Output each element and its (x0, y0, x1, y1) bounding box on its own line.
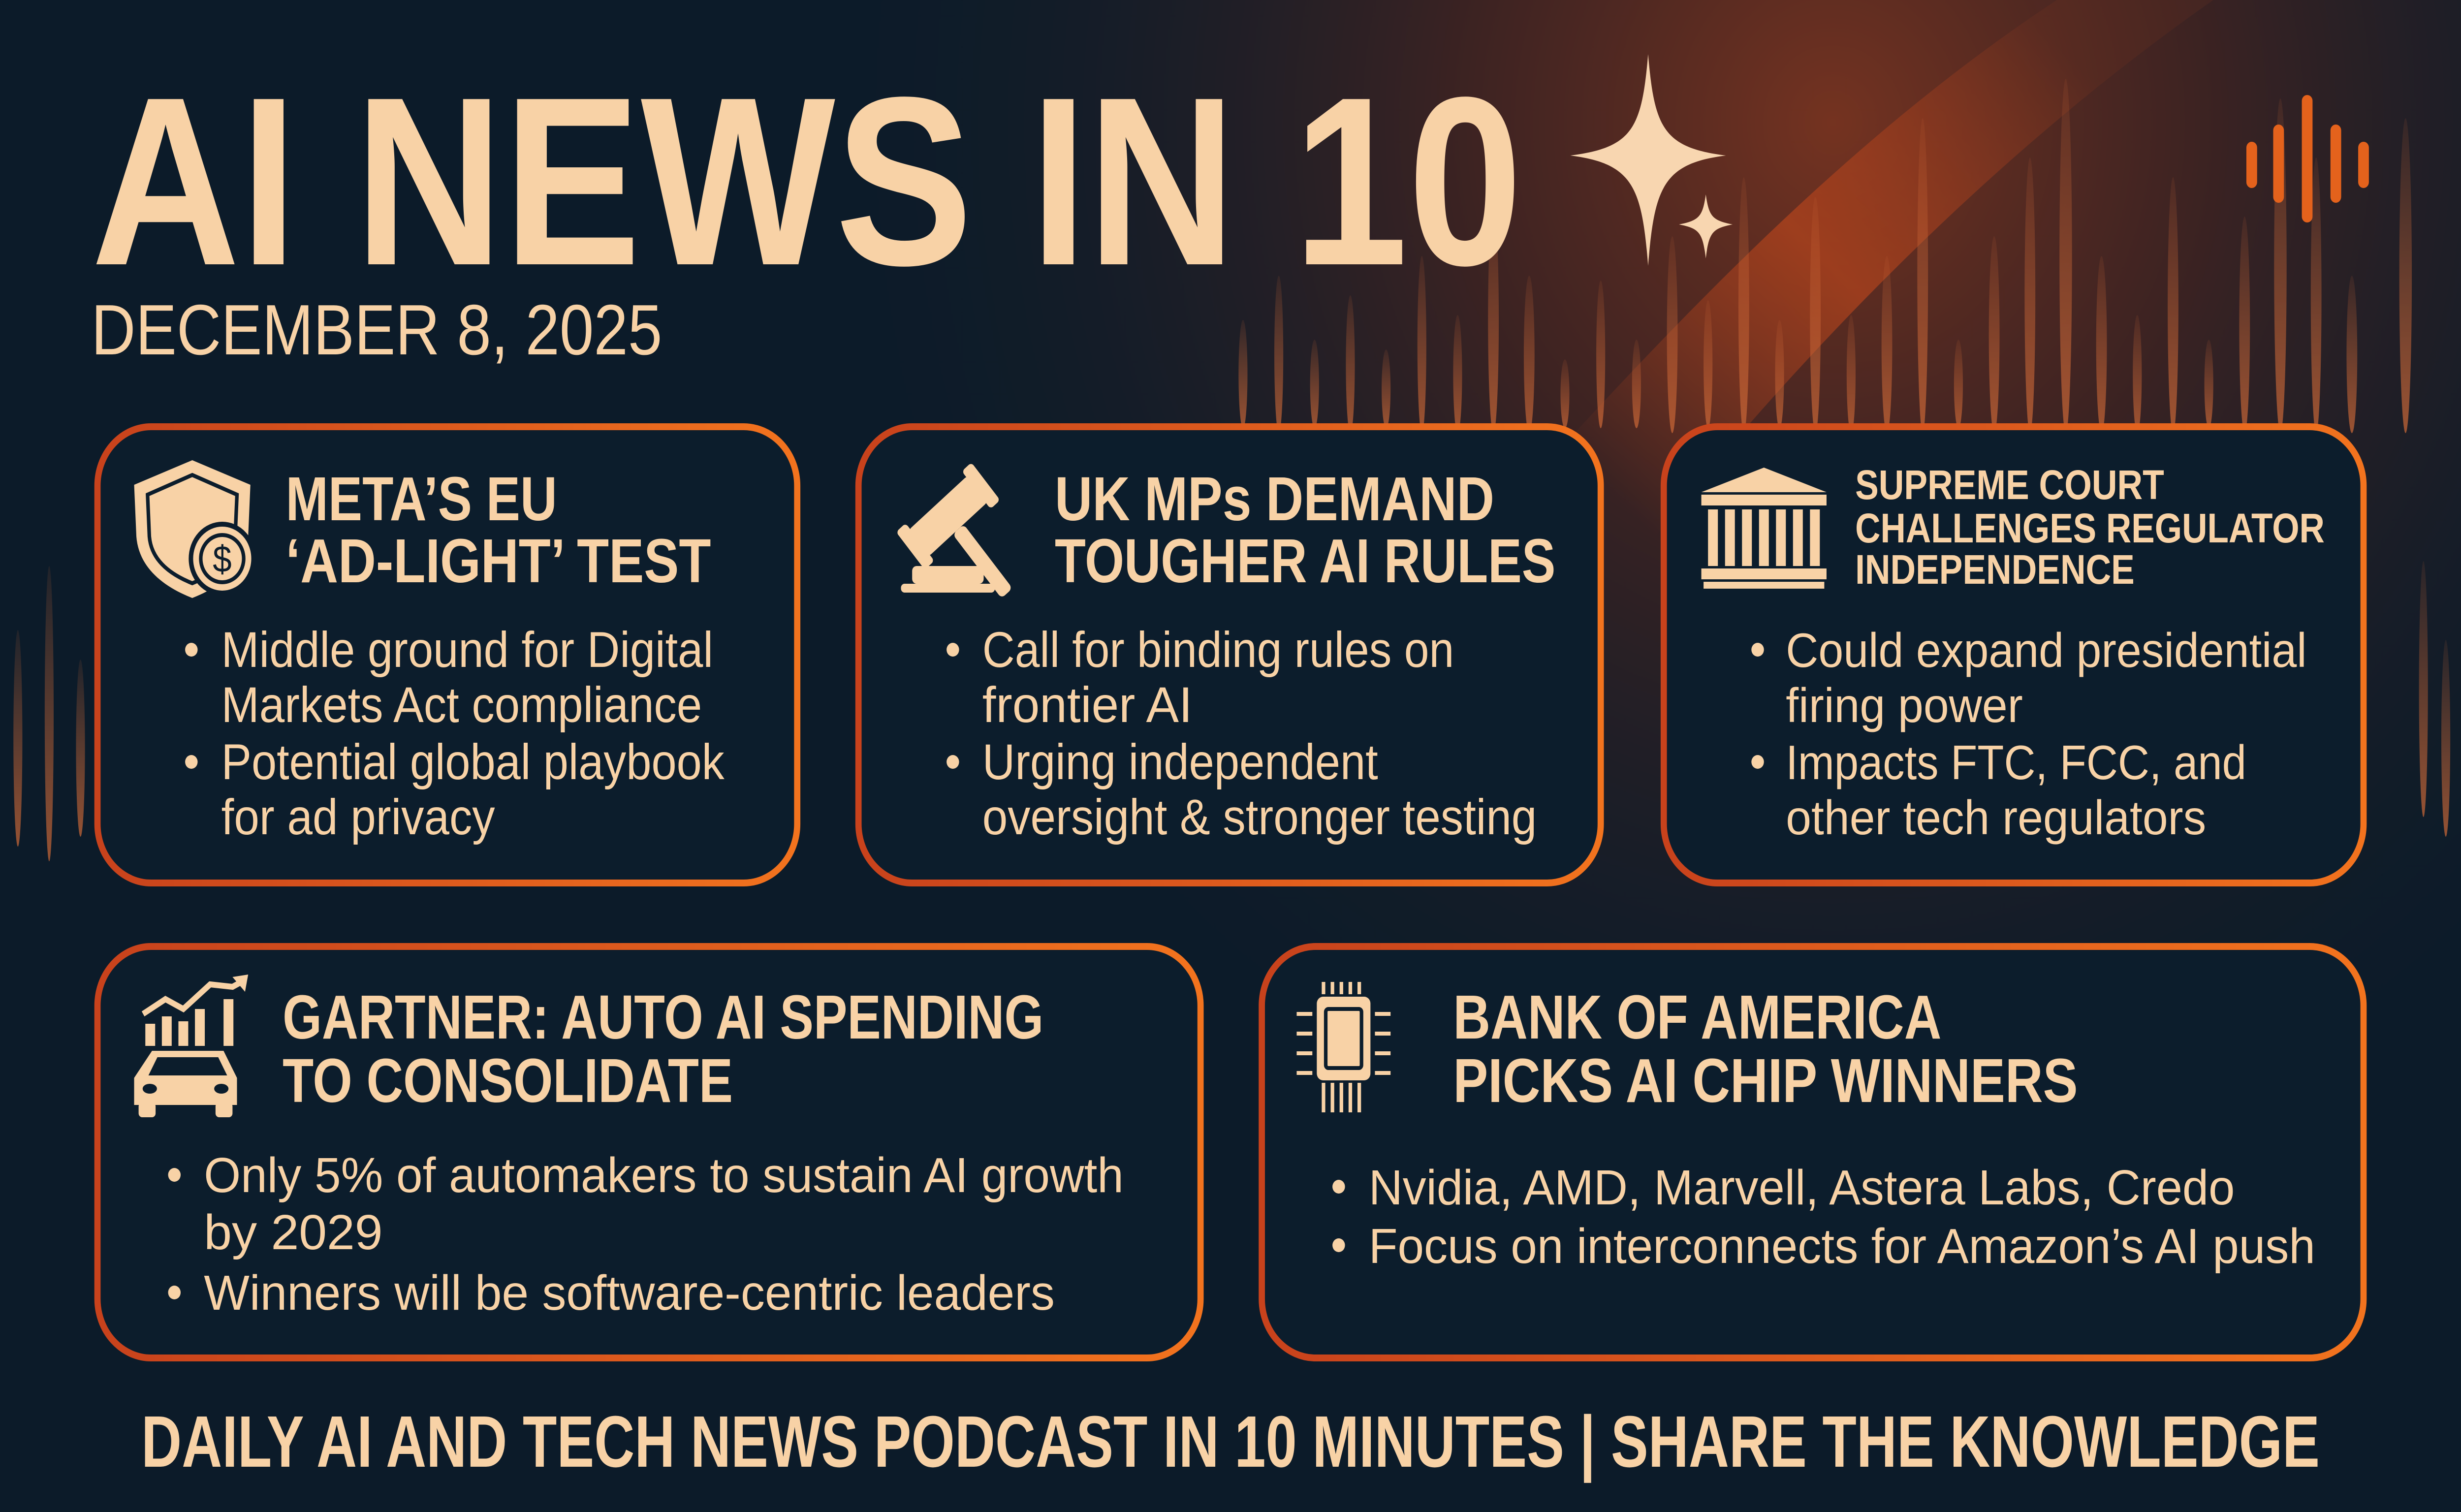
bullets (1332, 1161, 2315, 1274)
icon: shield with dollar: $ (213, 538, 232, 580)
bullets (185, 622, 725, 845)
heading: BANK OF AMERICA (1453, 982, 1941, 1052)
heading (1453, 982, 2078, 1115)
bullets: Middle ground for Digital (221, 622, 713, 678)
icon: sparkles (1570, 54, 1733, 266)
heading: SUPREME COURT (1855, 462, 2164, 508)
bullets: Could expand presidential (1786, 623, 2307, 677)
heading: META’S EU (285, 464, 557, 534)
panel: Meta (97, 427, 797, 883)
bullets: for ad privacy (221, 789, 495, 845)
heading: ‘AD-LIGHT’ TEST (285, 526, 711, 596)
panel: UK MPs (858, 427, 1601, 883)
panel: Supreme Court (1664, 427, 2364, 883)
bullets: Impacts FTC, FCC, and (1786, 735, 2246, 789)
heading: TO CONSOLIDATE (283, 1046, 733, 1115)
heading: CHALLENGES REGULATOR (1855, 505, 2325, 552)
bullets: Only 5% of automakers to sustain AI growth (204, 1148, 1124, 1203)
heading (285, 464, 711, 596)
bullets: Call for binding rules on (982, 622, 1454, 678)
bullets: Nvidia, AMD, Marvell, Astera Labs, Credo (1369, 1161, 2235, 1215)
heading (283, 982, 1043, 1115)
heading (1855, 462, 2325, 593)
bullets: Focus on interconnects for Amazon’s AI push (1369, 1219, 2315, 1274)
icon: car with growth chart (134, 975, 248, 1117)
heading: GARTNER: AUTO AI SPENDING (283, 982, 1043, 1052)
icon: podcast waveform (2252, 101, 2364, 217)
heading: UK MPs DEMAND (1055, 464, 1494, 534)
bullets: firing power (1786, 678, 2023, 732)
bullets: by 2029 (204, 1205, 383, 1260)
bullets: frontier AI (982, 677, 1193, 733)
icon: gavel (896, 463, 1044, 628)
bullets: other tech regulators (1786, 790, 2206, 845)
footer: DAILY AI AND TECH NEWS PODCAST IN 10 MINUTES | SHARE THE KNOWLEDGE (141, 1401, 2320, 1483)
heading (1055, 464, 1555, 596)
date: DECEMBER 8, 2025 (91, 290, 662, 370)
icon: chip (1296, 982, 1390, 1112)
bullets (168, 1148, 1124, 1321)
bullets (1751, 623, 2307, 845)
panel: Gartner (97, 946, 1200, 1358)
bullets: oversight & stronger testing (982, 789, 1537, 845)
bullets: Winners will be software-centric leaders (204, 1266, 1055, 1321)
bullets: Urging independent (982, 734, 1378, 790)
icon: shield with dollar (134, 460, 253, 598)
icon: courthouse (1702, 468, 1827, 589)
title: AI NEWS IN 10 (91, 47, 1522, 315)
bullets (947, 622, 1537, 845)
bullets: Markets Act compliance (221, 677, 702, 733)
panel: Bank of America (1262, 946, 2364, 1358)
heading: PICKS AI CHIP WINNERS (1453, 1046, 2078, 1115)
bullets: Potential global playbook (221, 734, 725, 790)
heading: INDEPENDENCE (1855, 547, 2135, 593)
heading: TOUGHER AI RULES (1055, 526, 1555, 596)
